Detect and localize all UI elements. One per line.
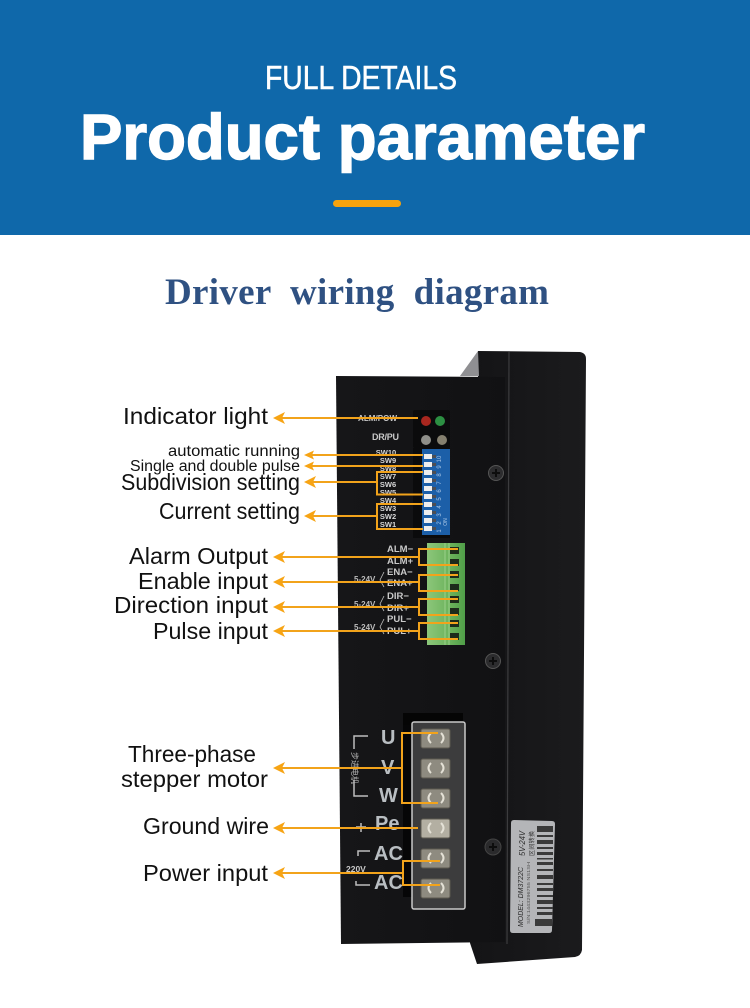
SW labels: SW2 <box>380 512 396 521</box>
blue DIP switch: 6 <box>437 489 443 493</box>
orange accent bar <box>333 200 401 207</box>
indicator LED window <box>413 410 450 448</box>
callout: Pulse input <box>153 618 458 644</box>
body seam highlight <box>507 352 509 944</box>
model sticker: 区间转换 <box>528 831 536 856</box>
power terminal labels: W <box>379 785 398 807</box>
signal pin labels: ENA− <box>387 567 413 578</box>
signal pin labels <box>354 544 414 637</box>
callout: Direction input <box>114 592 458 618</box>
green signal connector <box>427 543 465 645</box>
callout: Alarm Output: Alarm Output <box>129 543 269 569</box>
SW labels: SW10 <box>376 448 396 457</box>
signal pin labels: 5-24V <box>354 600 376 609</box>
section heading: Driver wiring diagram: Driver wiring diagram <box>165 272 549 313</box>
callout: Power input: Power input <box>143 860 269 886</box>
power terminal labels: U <box>381 727 395 749</box>
signal pin labels: PUL+ <box>387 626 412 637</box>
signal pin labels: ALM+ <box>387 556 414 567</box>
callout: Alarm Output <box>129 543 458 569</box>
callout: Single and double pulse: Single and double pulse <box>130 458 300 475</box>
signal pin labels: DIR+ <box>387 603 409 614</box>
callout: Enable input <box>138 568 458 594</box>
SW labels: SW3 <box>380 504 396 513</box>
callout: Pulse input: Pulse input <box>153 618 269 644</box>
power terminal labels: 220V <box>346 864 366 874</box>
blue DIP switch: 10 <box>437 455 443 462</box>
callout: Three-phase stepper motor <box>121 733 438 803</box>
panel text: LED labels: ALM/POW <box>358 414 397 423</box>
SW labels: SW1 <box>380 520 396 529</box>
panel text: LED labels <box>358 414 399 442</box>
power terminal labels: Pe <box>375 813 399 835</box>
blue DIP switch <box>413 448 450 538</box>
blue DIP switch: 5 <box>437 497 443 501</box>
stepper driver product photo <box>336 351 586 964</box>
callout: Three-phase stepper motor: stepper motor <box>121 766 268 792</box>
model sticker: S/N:1443296755 NS1SH <box>526 862 531 924</box>
blue DIP switch: 3 <box>437 513 443 517</box>
SW labels: SW5 <box>380 488 396 497</box>
panel text: LED labels: DR/PU <box>372 432 399 442</box>
blue DIP switch: 1 <box>437 529 443 533</box>
header banner <box>0 0 750 235</box>
SW labels: SW7 <box>380 472 396 481</box>
callout: Current setting <box>159 498 423 529</box>
power terminal labels <box>346 727 403 894</box>
SW labels: SW9 <box>380 456 396 465</box>
signal pin labels: ENA+ <box>387 578 413 589</box>
power terminal block <box>403 713 465 909</box>
blue DIP switch: 8 <box>437 473 443 477</box>
header kicker: FULL DETAILS: FULL DETAILS <box>265 59 457 96</box>
signal pin labels: 5-24V <box>354 575 376 584</box>
power terminal labels: AC <box>374 872 403 894</box>
power terminal labels: 步进电机 <box>350 752 360 784</box>
SW labels <box>376 448 397 529</box>
model sticker: 5V-24V <box>518 830 527 856</box>
blue DIP switch: ON <box>443 518 449 526</box>
signal pin labels: PUL− <box>387 614 412 625</box>
signal pin labels: DIR− <box>387 591 409 602</box>
callout: Indicator light: Indicator light <box>123 403 269 429</box>
SW labels: SW6 <box>380 480 396 489</box>
signal pin labels: ALM− <box>387 544 414 555</box>
callout: Subdivision setting <box>121 469 423 495</box>
screws <box>485 466 504 855</box>
callout: Ground wire: Ground wire <box>143 813 269 839</box>
power terminal labels: AC <box>374 843 403 865</box>
callout: Power input <box>143 860 440 886</box>
blue DIP switch: 4 <box>437 505 443 509</box>
SW labels: SW4 <box>380 496 397 505</box>
model sticker <box>510 820 555 933</box>
callout: Single and double pulse <box>130 458 423 475</box>
callout: Ground wire <box>143 813 418 839</box>
callout: automatic running: automatic running <box>168 443 300 460</box>
power terminal labels: V <box>381 757 395 779</box>
blue DIP switch: 9 <box>437 465 443 469</box>
driver front panel <box>336 376 505 944</box>
callout: automatic running <box>168 443 423 460</box>
callout: Three-phase stepper motor: Three-phase <box>128 741 256 767</box>
callout: Current setting: Current setting <box>159 498 300 524</box>
callout: Subdivision setting: Subdivision setting <box>121 469 300 495</box>
model sticker: MODEL: DM3722C <box>516 866 525 927</box>
callout: Enable input: Enable input <box>138 568 269 594</box>
blue DIP switch: 7 <box>437 481 443 485</box>
callout: Indicator light <box>123 403 418 429</box>
signal pin labels: 5-24V <box>354 623 376 632</box>
callout: Direction input: Direction input <box>114 592 269 618</box>
gray bevel corner <box>460 351 479 376</box>
SW labels: SW8 <box>380 464 396 473</box>
blue DIP switch: 2 <box>437 521 443 525</box>
main title: Product parameter: Product parameter <box>80 101 645 173</box>
driver rear body <box>470 351 586 964</box>
